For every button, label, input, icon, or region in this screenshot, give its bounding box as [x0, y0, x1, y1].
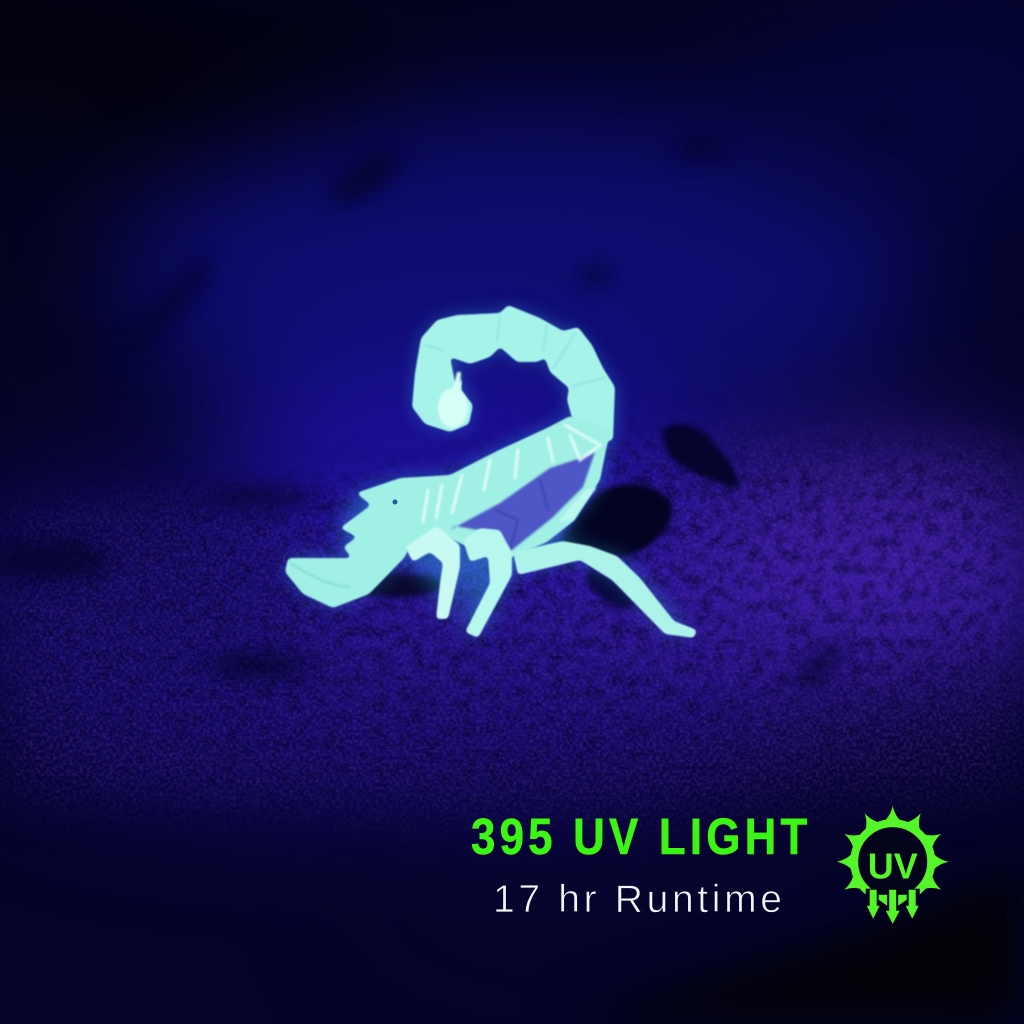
sun ring [854, 823, 931, 900]
arrows [867, 890, 919, 924]
tail segment lines [425, 315, 605, 386]
subheading: 17 hr Runtime: 17 hr Runtime [493, 878, 782, 921]
icon: UV sun with arrows [837, 806, 949, 924]
UV label: UV [868, 846, 918, 887]
scorpion outer glow [287, 308, 692, 637]
scorpion glowing under UV [285, 305, 697, 638]
scorpion eye [392, 500, 398, 504]
side plate [558, 487, 597, 522]
scorpion back leg [513, 541, 697, 638]
sun spikes [837, 806, 949, 902]
scorpion body and head [285, 416, 613, 608]
plate highlights [423, 425, 600, 522]
shadow under scorpion [345, 424, 740, 615]
claw detail [290, 563, 350, 587]
scorpion stinger [438, 372, 468, 428]
scorpion middle leg [463, 528, 512, 638]
scorpion tail [412, 305, 615, 445]
scorpion front leg [405, 526, 460, 619]
heading: 395 UV LIGHT: 395 UV LIGHT [471, 809, 807, 866]
arrow backing [866, 889, 920, 913]
scorpion belly [450, 452, 595, 550]
